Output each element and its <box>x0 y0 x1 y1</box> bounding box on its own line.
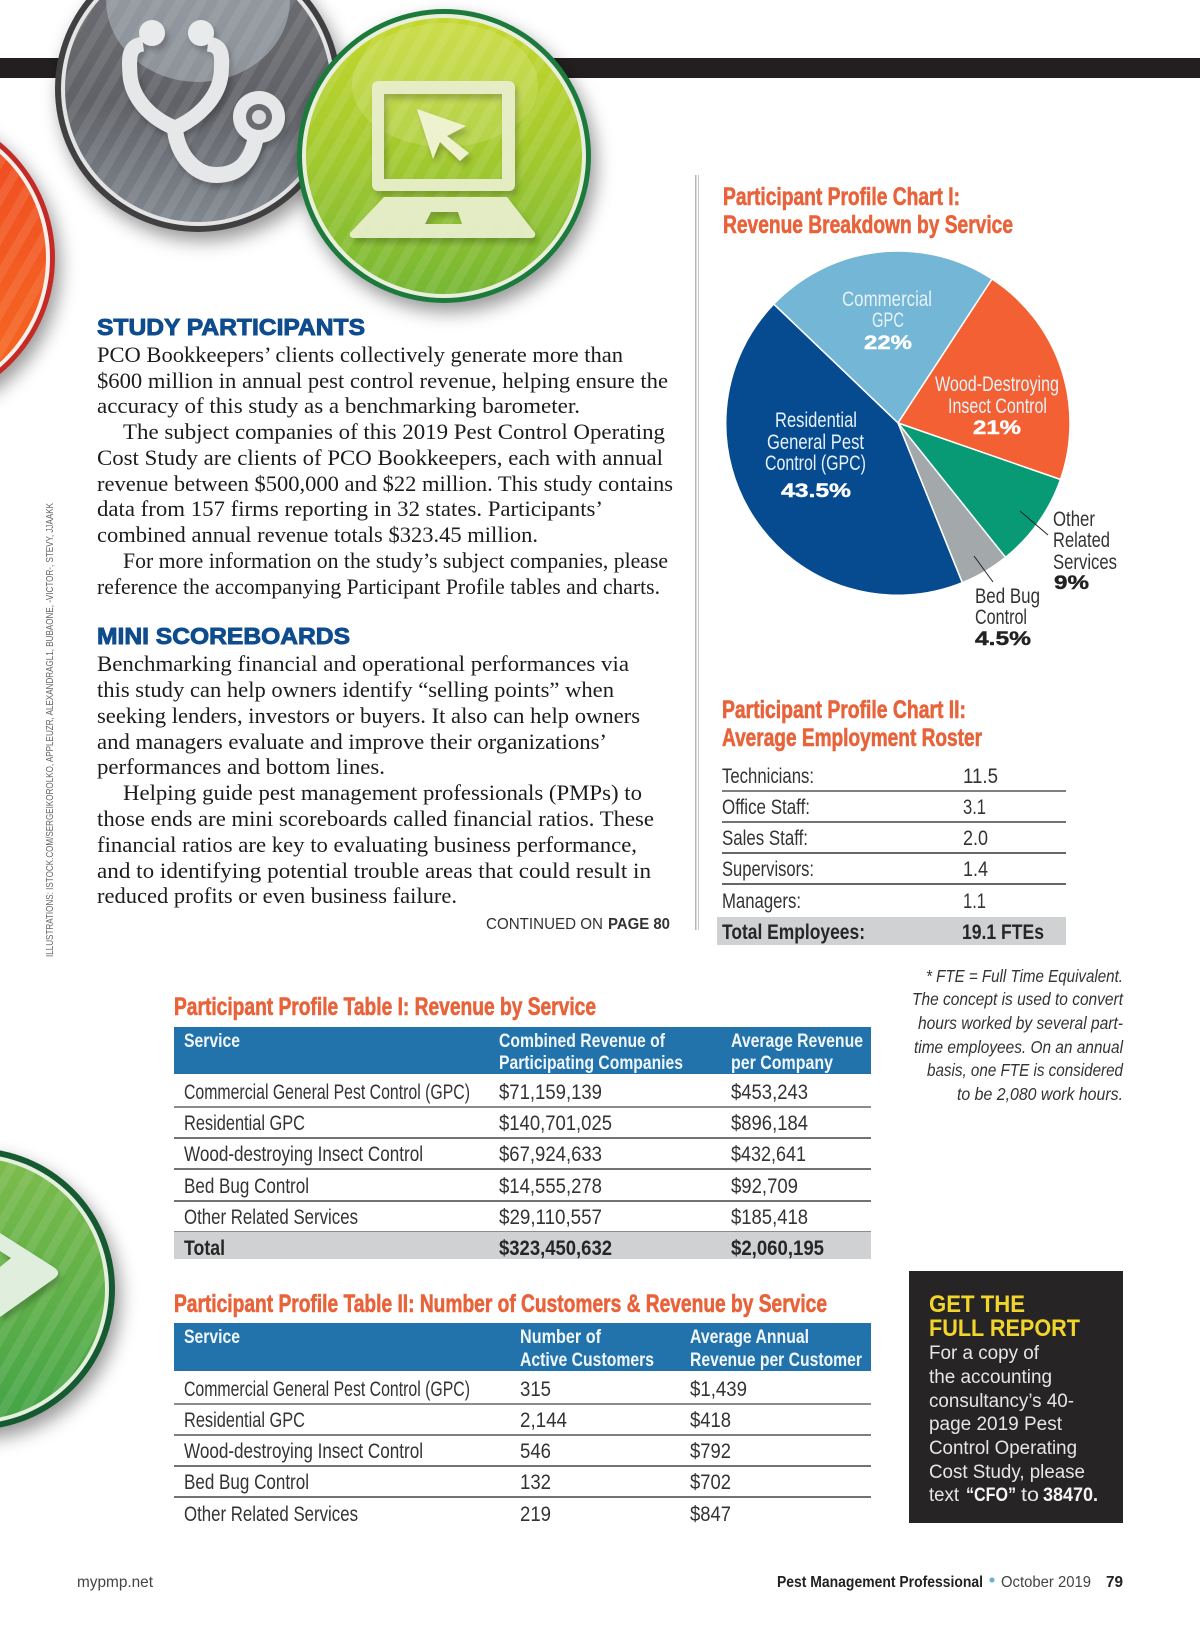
label: other related services with leader line <box>1020 508 1117 594</box>
roster rows: 1.4 <box>963 858 988 881</box>
table II rows: 546 <box>520 1440 551 1463</box>
chart II title <box>722 696 982 752</box>
black header bar <box>0 58 1200 78</box>
roster rows: 19.1 FTEs <box>962 921 1044 944</box>
table I header: per Company <box>731 1053 833 1074</box>
label: bed bug control with leader line: Bed Bug <box>975 585 1040 608</box>
label: other related services with leader line: Services <box>1053 551 1117 574</box>
roster rows: 11.5 <box>963 765 998 788</box>
table I rows: $140,701,025 <box>499 1112 612 1135</box>
table II title: Participant Profile Table II: Number of Customers & Revenue by Service <box>174 1290 827 1318</box>
roster rows: Managers: <box>722 890 801 913</box>
callout body: text <box>929 1485 960 1506</box>
footer: October 2019 <box>1001 1574 1091 1591</box>
table I rows: Total <box>184 1237 225 1260</box>
photo credit: ILLUSTRATIONS: ISTOCK.COM/SERGEIKOROLKO, APPLEUZR, ALEXANDRAGL1, BUBAONE, -VICTOR-, STEVY, JJAAKK <box>44 503 56 957</box>
table II rows: 132 <box>520 1471 551 1494</box>
label: residential general pest control: Control (GPC) <box>765 452 866 475</box>
icon: laptop badge <box>297 9 591 303</box>
callout body: Control Operating <box>929 1438 1077 1459</box>
table II rows: 219 <box>520 1503 551 1526</box>
panel: chart I revenue breakdown <box>723 183 1117 650</box>
table I rows: $71,159,139 <box>499 1081 602 1104</box>
table I rows: $453,243 <box>731 1081 808 1104</box>
table I rows: $29,110,557 <box>499 1206 602 1229</box>
text block: mini scoreboards <box>97 623 670 933</box>
table II rows: Wood-destroying Insect Control <box>184 1440 423 1463</box>
label: residential general pest control: Residential <box>775 409 857 432</box>
label: bed bug control with leader line <box>974 556 1040 650</box>
label: commercial GPC: Commercial <box>842 288 932 311</box>
callout body: the accounting <box>929 1367 1052 1388</box>
footer <box>77 1574 1123 1591</box>
body copy: mini scoreboards: those ends are mini scoreboards called financial ratios. These <box>97 806 654 831</box>
table I rows: Other Related Services <box>184 1206 358 1229</box>
table II rows: 2,144 <box>520 1409 567 1432</box>
label: wood-destroying insect control: 21% <box>973 418 1021 439</box>
table II rows: $792 <box>690 1440 731 1463</box>
chart II title: Participant Profile Chart II: <box>722 696 966 724</box>
table I rows: $67,924,633 <box>499 1143 602 1166</box>
table I header: Service <box>184 1031 240 1052</box>
table I header: Participating Companies <box>499 1053 683 1074</box>
table II header: Average Annual <box>690 1327 809 1348</box>
roster rows: Total Employees: <box>722 921 865 944</box>
body copy: study participants: $600 million in annual pest control revenue, helping ensure the <box>97 368 668 393</box>
continued on page 80: PAGE 80 <box>608 916 670 933</box>
chart title <box>723 183 1013 239</box>
table II header: Number of <box>520 1327 602 1348</box>
body copy: mini scoreboards: Benchmarking financial and operational performances via <box>97 651 629 676</box>
roster rows <box>722 765 1044 944</box>
footnote: FTE definition: basis, one FTE is considered <box>927 1060 1124 1080</box>
callout body: consultancy’s 40- <box>929 1391 1074 1412</box>
heading: study participants: STUDY PARTICIPANTS <box>97 314 365 340</box>
text block: study participants <box>97 314 673 599</box>
table II rows: Other Related Services <box>184 1503 358 1526</box>
table I rows: $896,184 <box>731 1112 808 1135</box>
body copy: study participants: reference the accompanying Participant Profile tables and charts. <box>97 574 660 599</box>
table II rows: Residential GPC <box>184 1409 305 1432</box>
table I rows: $2,060,195 <box>731 1237 824 1260</box>
table I total bar <box>174 1232 871 1259</box>
callout body: page 2019 Pest <box>929 1414 1063 1435</box>
footer: 79 <box>1106 1574 1123 1591</box>
panel: chart II employment roster <box>717 696 1066 945</box>
roster rows: Sales Staff: <box>722 827 808 850</box>
roster rows: 3.1 <box>963 796 986 819</box>
icon: green arrow badge <box>0 1148 115 1430</box>
table I rows: $323,450,632 <box>499 1237 612 1260</box>
body copy: study participants: PCO Bookkeepers’ clients collectively generate more than <box>97 342 623 367</box>
body copy: mini scoreboards: reduced profits or even business failure. <box>97 883 457 908</box>
body copy: mini scoreboards: and managers evaluate and improve their organizations’ <box>97 729 607 754</box>
continued on page 80 <box>486 916 670 933</box>
continued on page 80: CONTINUED ON <box>486 916 603 933</box>
footnote: FTE definition <box>912 966 1124 1104</box>
label: wood-destroying insect control <box>935 373 1059 439</box>
callout body: “CFO” <box>966 1485 1016 1506</box>
label: other related services with leader line: Other <box>1053 508 1095 531</box>
body copy: study participants: accuracy of this study as a benchmarking barometer. <box>97 393 580 418</box>
callout heading <box>929 1291 1080 1342</box>
chart title: Revenue Breakdown by Service <box>723 211 1013 239</box>
roster rows: Supervisors: <box>722 858 814 881</box>
body copy: mini scoreboards: Helping guide pest management professionals (PMPs) to <box>123 780 642 805</box>
table II rows: 315 <box>520 1378 551 1401</box>
body copy: study participants: The subject companies of this 2019 Pest Control Operating <box>123 419 665 444</box>
table II header: Active Customers <box>520 1350 654 1371</box>
panel: table I revenue by service <box>174 993 871 1260</box>
table I header <box>174 1027 871 1074</box>
table I rows: $92,709 <box>731 1175 798 1198</box>
chart title: Participant Profile Chart I: <box>723 183 960 211</box>
table II header <box>174 1323 871 1371</box>
label: commercial GPC: GPC <box>872 309 904 332</box>
table II rows: $847 <box>690 1503 731 1526</box>
roster total bar <box>717 917 1066 945</box>
body copy: mini scoreboards: seeking lenders, investors or buyers. It also can help owners <box>97 703 640 728</box>
chart II title: Average Employment Roster <box>722 724 982 752</box>
roster rows: 2.0 <box>963 827 988 850</box>
label: residential general pest control: General Pest <box>767 431 864 454</box>
label: other related services with leader line: Related <box>1053 529 1110 552</box>
body copy: study participants <box>97 342 673 599</box>
icon: stethoscope badge <box>55 0 341 232</box>
label: commercial GPC: 22% <box>864 333 912 354</box>
table II rows <box>184 1378 747 1526</box>
body copy: mini scoreboards: this study can help owners identify “selling points” when <box>97 677 614 702</box>
body copy: mini scoreboards: financial ratios are key to evaluating business performance, <box>97 832 637 857</box>
footnote: FTE definition: * FTE = Full Time Equivalent. <box>926 966 1123 986</box>
table I rows: $185,418 <box>731 1206 808 1229</box>
callout body <box>929 1343 1098 1506</box>
body copy: study participants: combined annual revenue totals $323.45 million. <box>97 522 538 547</box>
table I rows: $14,555,278 <box>499 1175 602 1198</box>
callout body: For a copy of <box>929 1343 1040 1364</box>
table I rows: Residential GPC <box>184 1112 305 1135</box>
table II rows: $702 <box>690 1471 731 1494</box>
footnote: FTE definition: hours worked by several part- <box>918 1013 1123 1033</box>
body copy: mini scoreboards <box>97 651 654 908</box>
label: wood-destroying insect control: Insect Control <box>948 395 1047 418</box>
label: other related services with leader line: 9% <box>1054 573 1089 594</box>
table I header: Combined Revenue of <box>499 1031 666 1052</box>
table I rows: Wood-destroying Insect Control <box>184 1143 423 1166</box>
label: wood-destroying insect control: Wood-Destroying <box>935 373 1059 396</box>
roster rows: Office Staff: <box>722 796 810 819</box>
icon: orange badge <box>0 108 55 408</box>
table II header: Service <box>184 1327 240 1348</box>
table II header: Revenue per Customer <box>690 1350 862 1371</box>
callout body: to <box>1021 1485 1039 1506</box>
table I title: Participant Profile Table I: Revenue by Service <box>174 993 596 1021</box>
pie chart <box>726 251 1070 595</box>
callout heading: GET THE <box>929 1291 1025 1318</box>
roster rows: 1.1 <box>963 890 986 913</box>
footnote: FTE definition: time employees. On an annual <box>914 1037 1124 1057</box>
body copy: mini scoreboards: performances and bottom lines. <box>97 754 385 779</box>
label: residential general pest control <box>765 409 866 502</box>
label: bed bug control with leader line: Control <box>975 606 1027 629</box>
callout body: 38470. <box>1043 1485 1098 1506</box>
table I rows <box>184 1081 824 1260</box>
body copy: study participants: For more information on the study’s subject companies, please <box>123 548 668 573</box>
callout body: Cost Study, please <box>929 1462 1085 1483</box>
table II rows: Commercial General Pest Control (GPC) <box>184 1378 470 1401</box>
footnote: FTE definition: The concept is used to convert <box>912 989 1124 1009</box>
roster rows: Technicians: <box>722 765 814 788</box>
label: bed bug control with leader line: 4.5% <box>975 629 1031 650</box>
table I rows: Bed Bug Control <box>184 1175 309 1198</box>
body copy: study participants: data from 157 firms reporting in 32 states. Participants’ <box>97 496 603 521</box>
body copy: mini scoreboards: and to identifying potential trouble areas that could result in <box>97 858 651 883</box>
panel: table II customers and revenue by service <box>174 1290 871 1526</box>
body copy: study participants: Cost Study are clients of PCO Bookkeepers, each with annual <box>97 445 663 470</box>
heading: mini scoreboards: MINI SCOREBOARDS <box>97 623 350 649</box>
footer: mypmp.net <box>77 1574 154 1591</box>
table I rows: $432,641 <box>731 1143 806 1166</box>
table I rows: Commercial General Pest Control (GPC) <box>184 1081 470 1104</box>
body copy: study participants: revenue between $500,000 and $22 million. This study contains <box>97 471 673 496</box>
label: commercial GPC <box>842 288 932 354</box>
callout: get the full report <box>909 1271 1123 1523</box>
footer: Pest Management Professional <box>777 1574 983 1591</box>
table II rows: Bed Bug Control <box>184 1471 309 1494</box>
table II rows: $418 <box>690 1409 731 1432</box>
footnote: FTE definition: to be 2,080 work hours. <box>957 1084 1123 1104</box>
callout heading: FULL REPORT <box>929 1315 1080 1342</box>
label: residential general pest control: 43.5% <box>781 481 851 502</box>
table II rows: $1,439 <box>690 1378 747 1401</box>
table I header: Average Revenue <box>731 1031 863 1052</box>
